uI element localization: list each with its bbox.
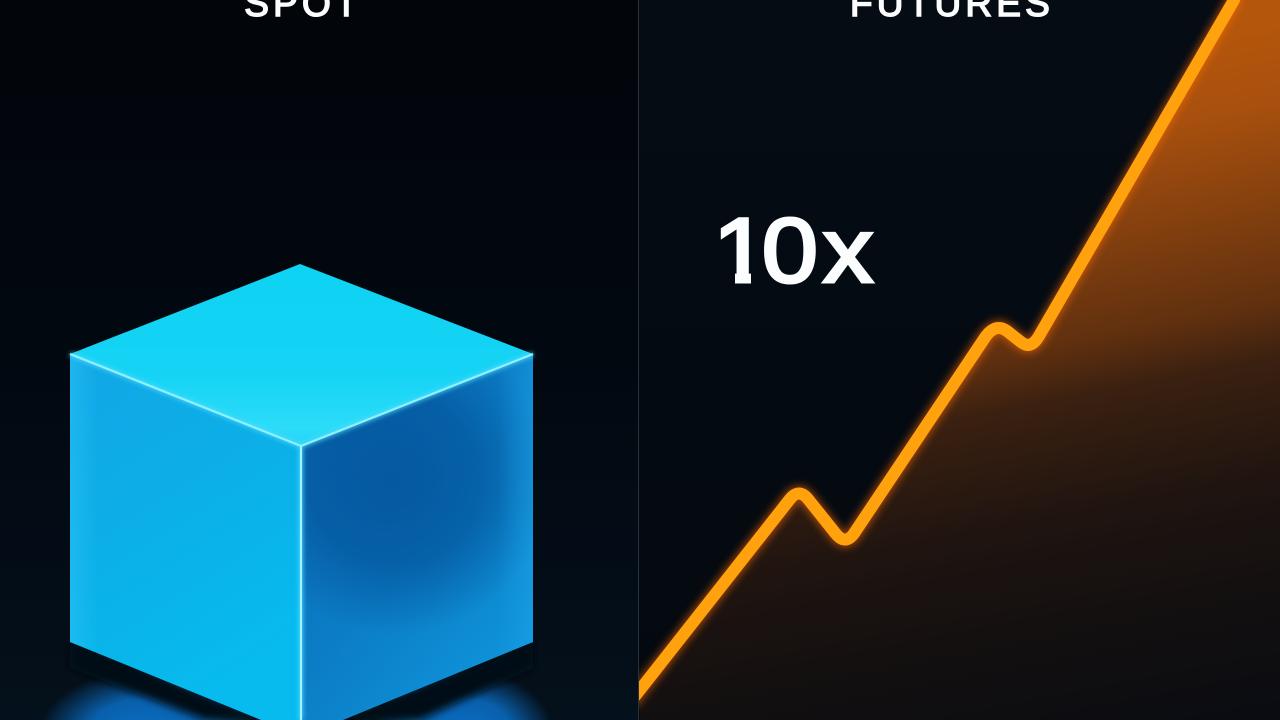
chart: rising orange glowing line <box>632 0 1234 700</box>
cube left face <box>70 354 301 720</box>
icon: glowing blue cube <box>70 264 533 720</box>
floor glow under cube <box>35 640 556 720</box>
cube right face <box>301 354 533 720</box>
center divider <box>638 0 639 720</box>
cube glowing edges <box>70 354 533 720</box>
panel: futures background <box>639 0 1280 720</box>
chart: futures area under line <box>640 0 1280 720</box>
cube top face <box>70 264 533 446</box>
leverage label: 10x: 10x <box>713 199 873 302</box>
panel: spot background <box>0 0 638 720</box>
